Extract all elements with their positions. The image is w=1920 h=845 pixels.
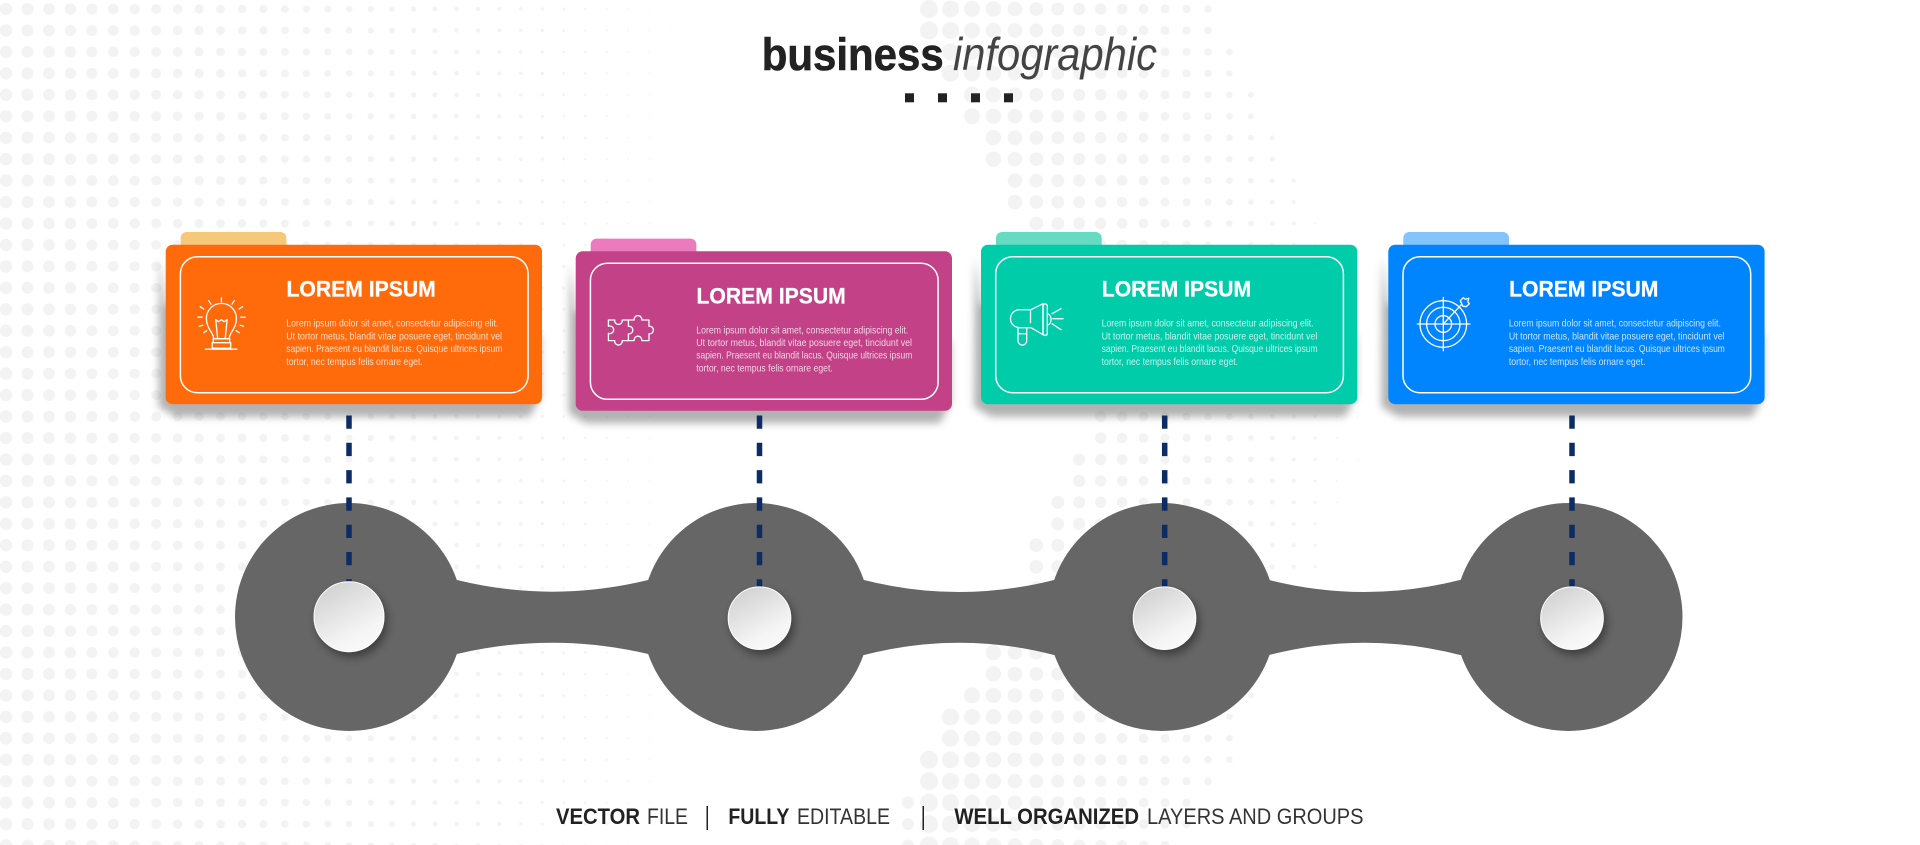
folder tab: [1403, 232, 1509, 256]
title: [762, 28, 1157, 80]
body text: tortor, nec tempus felis ornare eget.: [696, 362, 833, 374]
footer tagline: EDITABLE: [797, 804, 890, 829]
panel: card 1 orange: [159, 232, 542, 417]
folder tab: [181, 232, 286, 256]
panel: card 4 blue: [1381, 232, 1765, 417]
body text: tortor, nec tempus felis ornare eget.: [1102, 356, 1238, 368]
footer tagline: WELL ORGANIZED: [954, 804, 1139, 829]
icon: puzzle pieces: [608, 316, 653, 345]
card body: [166, 245, 542, 404]
folder tab: [996, 232, 1102, 256]
body text: sapien. Praesent eu blandit lacus. Quisque ultrices ipsum: [286, 343, 503, 355]
card body: [1388, 245, 1765, 404]
icon: light bulb: [198, 298, 245, 349]
card shadow: [569, 263, 951, 423]
footer tagline: FULLY: [728, 804, 790, 829]
body text: Ut tortor metus, blandit vitae posuere eget, tincidunt vel: [286, 330, 502, 342]
inner outline: [1403, 257, 1751, 393]
footer tagline: LAYERS AND GROUPS: [1147, 804, 1364, 829]
card body: [576, 251, 952, 411]
heading: LOREM IPSUM: [1102, 277, 1251, 302]
heading: LOREM IPSUM: [697, 283, 846, 308]
icon: target with arrow: [1417, 297, 1470, 351]
body text: Lorem ipsum dolor sit amet, consectetur adipiscing elit.: [1509, 318, 1721, 330]
folder tab: [591, 239, 696, 263]
body text: sapien. Praesent eu blandit lacus. Quisque ultrices ipsum: [1509, 343, 1725, 355]
card body: [981, 245, 1357, 404]
inner outline: [590, 263, 938, 399]
body text: Ut tortor metus, blandit vitae posuere eget, tincidunt vel: [1102, 330, 1317, 342]
body text: Lorem ipsum dolor sit amet, consectetur adipiscing elit.: [286, 318, 498, 330]
body text: Lorem ipsum dolor sit amet, consectetur adipiscing elit.: [1102, 318, 1314, 330]
card shadow: [1381, 257, 1763, 417]
heading: LOREM IPSUM: [286, 277, 436, 302]
title: business: [762, 29, 944, 80]
body text: Ut tortor metus, blandit vitae posuere eget, tincidunt vel: [1509, 330, 1725, 342]
title decoration: four squares: [905, 93, 1013, 102]
heading: LOREM IPSUM: [1509, 277, 1658, 302]
card shadow: [974, 257, 1356, 417]
body text: [1509, 318, 1725, 368]
footer tagline: FILE: [647, 804, 688, 829]
panel: card 2 magenta: [569, 239, 952, 423]
icon: megaphone: [1010, 304, 1063, 345]
body text: Ut tortor metus, blandit vitae posuere eget, tincidunt vel: [696, 337, 912, 349]
title: infographic: [953, 28, 1157, 80]
panel: card 3 teal: [974, 232, 1357, 417]
body text: [1102, 318, 1318, 368]
footer tagline: VECTOR: [556, 804, 640, 829]
body text: sapien. Praesent eu blandit lacus. Quisque ultrices ipsum: [1102, 343, 1318, 355]
footer tagline: [556, 804, 1364, 830]
timeline: grey circles joined by curved connectors: [235, 503, 1682, 731]
card shadow: [159, 257, 541, 417]
inner outline: [180, 257, 528, 393]
body text: Lorem ipsum dolor sit amet, consectetur adipiscing elit.: [696, 324, 908, 336]
body text: sapien. Praesent eu blandit lacus. Quisque ultrices ipsum: [696, 350, 913, 362]
body text: tortor, nec tempus felis ornare eget.: [1509, 356, 1645, 368]
inner outline: [996, 257, 1343, 393]
body text: tortor, nec tempus felis ornare eget.: [286, 356, 423, 368]
dashed connector lines: [349, 416, 1572, 590]
body text: [286, 318, 503, 368]
body text: [696, 324, 913, 374]
timeline nodes: white discs: [314, 582, 1603, 652]
